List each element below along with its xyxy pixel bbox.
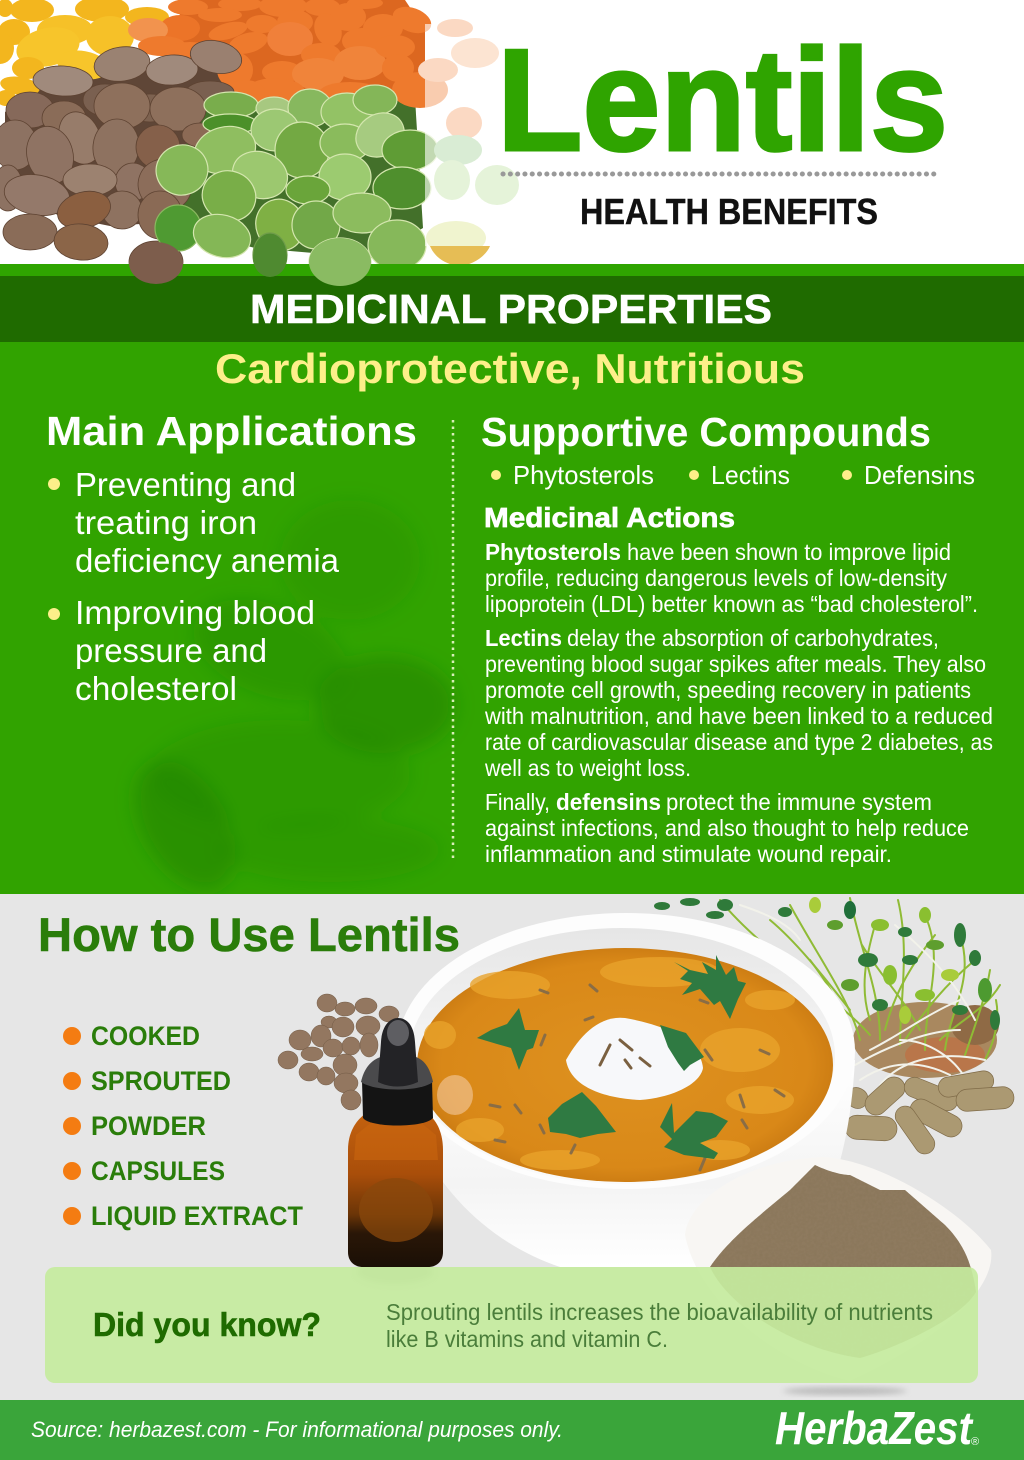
panel: footer: [0, 1400, 1024, 1460]
paragraph: defensins: defensins: [556, 789, 661, 815]
callout heading: Did you know?: [93, 1306, 321, 1343]
source note: Source: herbazest.com - For informational purposes only.: [31, 1417, 563, 1442]
green split peas: [149, 85, 438, 286]
logo registered mark: ®: [971, 1436, 979, 1448]
paragraph: lectins: with malnutrition, and have been linked to a reduced: [484, 703, 993, 729]
yogurt dollop: [566, 1018, 703, 1100]
icon: whole lentils pile: [278, 994, 399, 1110]
paragraph: phytosterols: lipoprotein (LDL) better known as “bad cholesterol”.: [485, 591, 978, 617]
bullet: blood pressure: [48, 594, 315, 707]
bowl body: [397, 1060, 855, 1267]
sprout pale stems: [740, 905, 985, 1085]
compounds list: [491, 460, 975, 490]
icon: bowl of lentil soup: [397, 913, 855, 1267]
light green stripe: [0, 264, 1024, 276]
paragraph: defensins: Finally,: [485, 789, 550, 815]
paragraph: phytosterols: profile, reducing dangerous levels of low-density: [485, 565, 947, 591]
callout: did you know: [45, 1267, 978, 1383]
icon: sprouts: [654, 897, 1000, 1085]
bullet: blood pressure: cholesterol: [75, 670, 237, 707]
soup texture: [424, 957, 795, 1170]
bullet: preventing anemia: Preventing and: [75, 466, 296, 503]
compounds list: Defensins: [864, 460, 975, 490]
paragraph: phytosterols: Phytosterols: [485, 539, 621, 565]
main applications heading: Main Applications: [46, 408, 417, 454]
compounds list: Phytosterols: [513, 460, 654, 490]
bullet: preventing anemia: deficiency anemia: [75, 542, 340, 579]
panel: medicinal properties banner: [0, 238, 1024, 342]
cumin seeds: [490, 985, 784, 1170]
logo: HerbaZest: HerbaZest: [775, 1402, 973, 1454]
yellow lentils: [0, 0, 169, 106]
soup highlight: [437, 1075, 473, 1115]
paragraph: defensins: against infections, and also thought to help reduce: [485, 815, 969, 841]
lentil overlap on banner: [129, 238, 371, 286]
paragraph: lectins: delay the absorption of carbohydrates,: [567, 625, 939, 651]
callout text: Sprouting lentils increases the bioavailability of nutrients: [386, 1299, 933, 1325]
paragraph: phytosterols: have been shown to improve lipid: [627, 539, 951, 565]
bullet: preventing anemia: treating iron: [75, 504, 257, 541]
lentil pile underlay: [5, 0, 425, 258]
supportive compounds heading: Supportive Compounds: [481, 409, 931, 455]
panel: how to use section: [0, 894, 1024, 1400]
usage list: COOKED: [91, 1021, 200, 1051]
bowl inner wall: [409, 928, 835, 1184]
icon: dropper bottle: [348, 1018, 443, 1284]
yogurt seeds: [600, 1040, 650, 1068]
usage list: LIQUID EXTRACT: [91, 1201, 303, 1231]
usage list: [63, 1021, 303, 1231]
paragraph: lectins: preventing blood sugar spikes after meals. They also: [485, 651, 986, 677]
banner heading: MEDICINAL PROPERTIES: [250, 286, 772, 332]
faded overlay panel: [425, 24, 1024, 246]
title: Lentils: [497, 19, 948, 181]
sprout leaves: [654, 897, 1000, 1030]
usage list: CAPSULES: [91, 1156, 225, 1186]
usage list: SPROUTED: [91, 1066, 231, 1096]
faded lentils on the overlay side: [418, 19, 519, 266]
panel: main green section: [0, 342, 1024, 907]
usage list: POWDER: [91, 1111, 206, 1141]
decorative blood vessel image: [114, 500, 455, 907]
section subtitle: Cardioprotective, Nutritious: [215, 345, 805, 392]
bullet: preventing anemia: [48, 466, 340, 579]
sprout roots base: [853, 1002, 999, 1078]
soup: [417, 948, 833, 1182]
bowl rim: [397, 913, 855, 1189]
subtitle: HEALTH BENEFITS: [580, 191, 878, 232]
icon: capsules: [842, 1069, 1015, 1158]
paragraph: defensins: inflammation and stimulate wound repair.: [485, 841, 892, 867]
icon: powder bowl: [685, 1157, 991, 1395]
medicinal actions heading: Medicinal Actions: [484, 502, 735, 533]
powder: [710, 1165, 976, 1358]
brown lentils: [0, 36, 245, 283]
how to use heading: How to Use Lentils: [38, 908, 460, 961]
callout text: [386, 1299, 933, 1352]
orange lentils: [128, 0, 448, 108]
paragraph: phytosterols: [485, 539, 978, 617]
compounds list: Lectins: [711, 460, 790, 490]
parsley leaves: [477, 955, 746, 1159]
panel: header lentils photo: [0, 0, 1024, 286]
callout text: like B vitamins and vitamin C.: [386, 1326, 668, 1352]
paragraph: lectins: Lectins: [485, 625, 562, 651]
paragraph: lectins: promote cell growth, speeding recovery in patients: [485, 677, 971, 703]
paragraph: defensins: protect the immune system: [666, 789, 932, 815]
bullet: blood pressure: Improving blood: [75, 594, 315, 631]
bullet: blood pressure: pressure and: [75, 632, 267, 669]
paragraph: lectins: well as to weight loss.: [484, 755, 691, 781]
paragraph: defensins: [485, 789, 969, 867]
paragraph: lectins: [484, 625, 993, 781]
sprout stems: [720, 898, 1000, 1060]
